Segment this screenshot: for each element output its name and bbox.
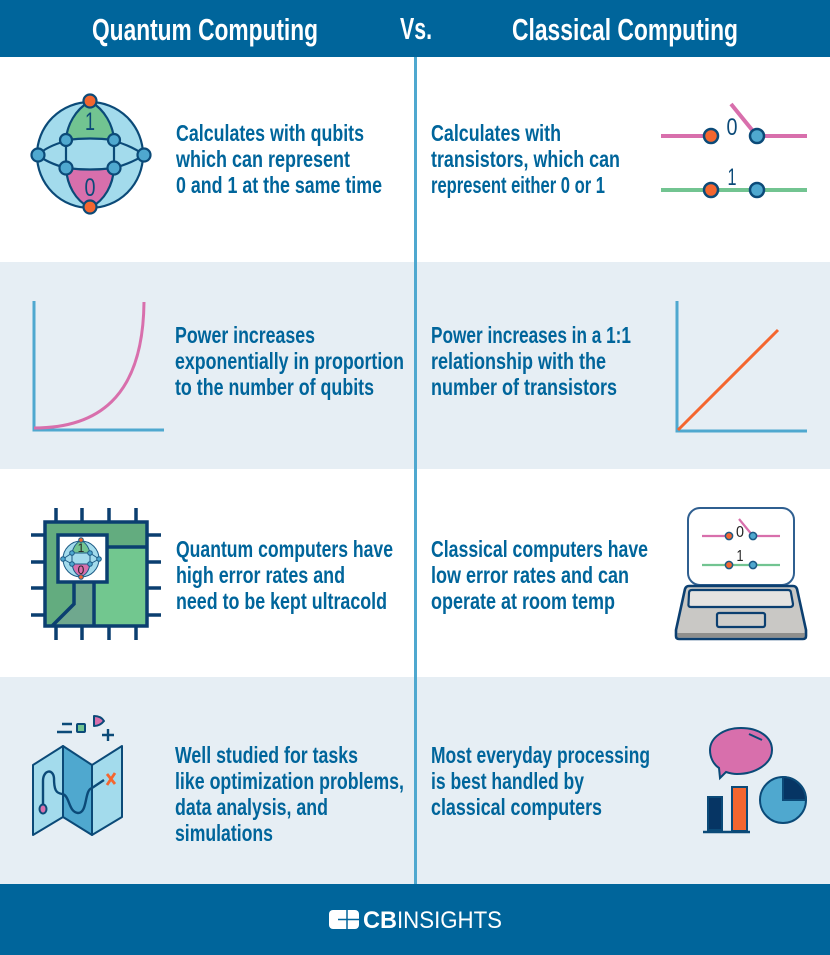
text: classical tasks [431, 742, 650, 820]
text: exponential power: exponentially in proportion [175, 348, 404, 374]
text: quantum error rates: need to be kept ultracold [176, 588, 387, 614]
text: classical tasks: Most everyday processing [431, 742, 650, 768]
text: qubits: Calculates with qubits [176, 120, 364, 146]
icon: map [33, 716, 122, 835]
text: classical tasks: is best handled by [431, 768, 584, 794]
text: classical error rates: Classical computers have [431, 536, 648, 562]
text: quantum tasks: simulations [175, 820, 273, 846]
text: quantum tasks: Well studied for tasks [175, 742, 358, 768]
icon: qubit sphere: 0 [84, 174, 96, 202]
text: linear power: relationship with the [431, 348, 606, 374]
icon: quantum chip [31, 508, 161, 640]
footer bar [0, 884, 830, 955]
text: transistors [431, 120, 620, 198]
text: exponential power: to the number of qubits [175, 374, 374, 400]
text: transistors: Calculates with [431, 120, 561, 146]
text: quantum error rates [176, 536, 393, 614]
text: linear power: number of transistors [431, 374, 617, 400]
text: transistors: represent either 0 or 1 [431, 172, 605, 198]
heading: Quantum Computing: Quantum Computing [92, 13, 318, 47]
text: qubits: 0 and 1 at the same time [176, 172, 382, 198]
icon: laptop: 1 [736, 548, 744, 565]
icon: transistor switches: 0 [726, 114, 738, 141]
icon: quantum chip: 0 [78, 563, 85, 577]
icon: quantum chip: 1 [78, 541, 85, 555]
text: exponential power [175, 322, 404, 400]
heading: Vs.: Vs. [400, 12, 432, 46]
text: quantum tasks: like optimization problems, [175, 768, 404, 794]
text: quantum tasks [175, 742, 404, 846]
icon: transistor switches: 1 [728, 164, 736, 191]
text: linear power [431, 322, 631, 400]
text: classical error rates [431, 536, 648, 614]
logo: CB Insights: CB [363, 907, 397, 934]
logo: CB Insights: INSIGHTS [397, 907, 502, 934]
chart: linear line [677, 301, 807, 431]
text: quantum error rates: Quantum computers have [176, 536, 393, 562]
icon: qubit sphere: 1 [85, 108, 95, 136]
text: quantum error rates: high error rates and [176, 562, 345, 588]
text: qubits [175, 120, 382, 198]
text: qubits: which can represent [175, 146, 350, 172]
icon: laptop [676, 508, 806, 639]
text: transistors: transistors, which can [431, 146, 620, 172]
icon: chat and charts [703, 728, 806, 832]
icon: qubit sphere [32, 94, 150, 214]
icon: laptop: 0 [736, 524, 744, 541]
text: quantum tasks: data analysis, and [175, 794, 328, 820]
heading: Classical Computing: Classical Computing [512, 13, 738, 47]
text: classical tasks: classical computers [431, 794, 602, 820]
text: classical error rates: operate at room temp [431, 588, 615, 614]
text: exponential power: Power increases [175, 322, 315, 348]
icon: transistor switches [661, 104, 807, 197]
text: linear power: Power increases in a 1:1 [431, 322, 631, 348]
header bar [0, 0, 830, 57]
text: classical error rates: low error rates and can [431, 562, 629, 588]
chart: exponential curve [34, 301, 164, 430]
logo: CB Insights [329, 907, 502, 934]
